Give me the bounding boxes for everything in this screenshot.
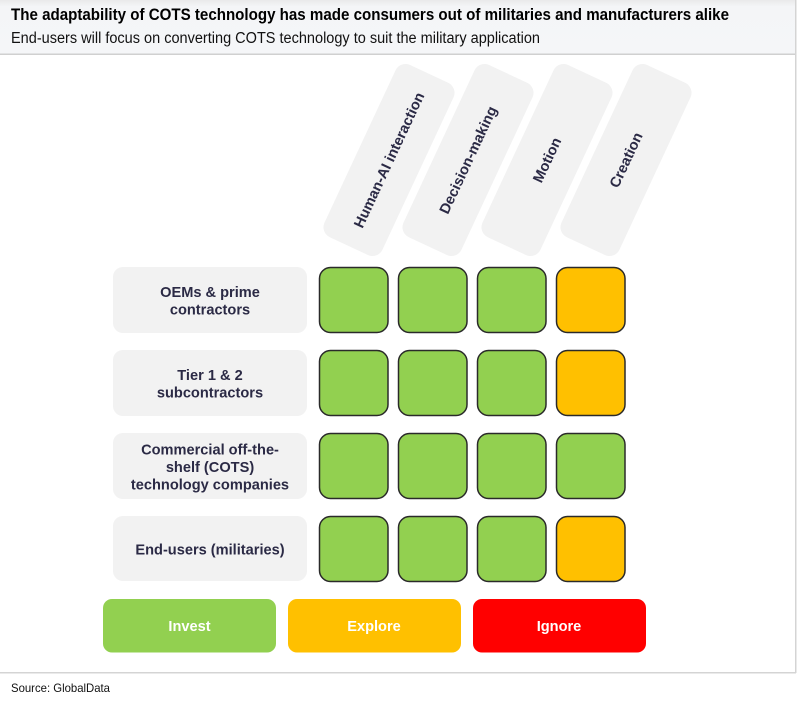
row label: OEMs & prime xyxy=(160,285,260,301)
cell: invest xyxy=(320,350,388,416)
cell: invest xyxy=(556,434,625,498)
cell: invest xyxy=(478,516,546,582)
legend: Invest xyxy=(103,599,276,652)
cell: invest xyxy=(398,516,467,582)
subtitle: End-users will focus on converting COTS technology to suit the military application xyxy=(11,30,540,47)
row label: Commercial off-the- xyxy=(141,442,279,458)
legend: Explore: Explore xyxy=(347,619,401,635)
cell: invest xyxy=(398,350,467,416)
row label: contractors xyxy=(170,302,250,318)
cell: invest xyxy=(398,434,467,498)
legend: Invest: Invest xyxy=(168,619,211,635)
row: Tier 1 & 2 subcontractors xyxy=(113,350,625,416)
row: COTS technology companies xyxy=(113,433,625,499)
legend xyxy=(103,599,646,652)
column header: Motion: Motion xyxy=(531,135,565,185)
row label: technology companies xyxy=(131,478,289,494)
legend: Ignore: Ignore xyxy=(537,619,581,635)
cell: invest xyxy=(320,516,388,582)
legend: Ignore xyxy=(473,599,646,652)
legend: Explore xyxy=(288,599,461,652)
row label xyxy=(113,267,307,333)
column header: Decision-making: Decision-making xyxy=(437,104,501,217)
row label: End-users (militaries) xyxy=(135,542,285,558)
column header: Decision-making xyxy=(399,60,537,260)
cell: invest xyxy=(398,268,467,332)
row label xyxy=(113,350,307,416)
column header: Human-AI interaction: Human-AI interaction xyxy=(351,90,428,231)
title: The adaptability of COTS technology has made consumers out of militaries and manufacturers alike xyxy=(11,6,729,24)
column header: Creation: Creation xyxy=(607,130,647,191)
cell: invest xyxy=(478,350,546,416)
column header: Creation xyxy=(557,60,695,260)
column header: Human-AI interaction xyxy=(320,60,458,260)
cell: invest xyxy=(320,268,388,332)
source: Source: GlobalData xyxy=(11,681,110,695)
column header: Motion xyxy=(478,60,616,260)
row: OEMs & prime contractors xyxy=(113,267,625,333)
cell: invest xyxy=(478,268,546,332)
row label: subcontractors xyxy=(157,386,263,402)
cell: explore xyxy=(556,350,625,416)
cell: invest xyxy=(320,434,388,498)
row label: Tier 1 & 2 xyxy=(177,368,243,384)
row label xyxy=(113,516,307,581)
row: End-users (militaries) xyxy=(113,516,625,582)
column headers xyxy=(320,60,695,260)
cell: explore xyxy=(556,268,625,332)
cell: explore xyxy=(556,516,625,582)
cell: invest xyxy=(478,434,546,498)
row label: shelf (COTS) xyxy=(166,460,254,476)
row label xyxy=(113,433,307,499)
